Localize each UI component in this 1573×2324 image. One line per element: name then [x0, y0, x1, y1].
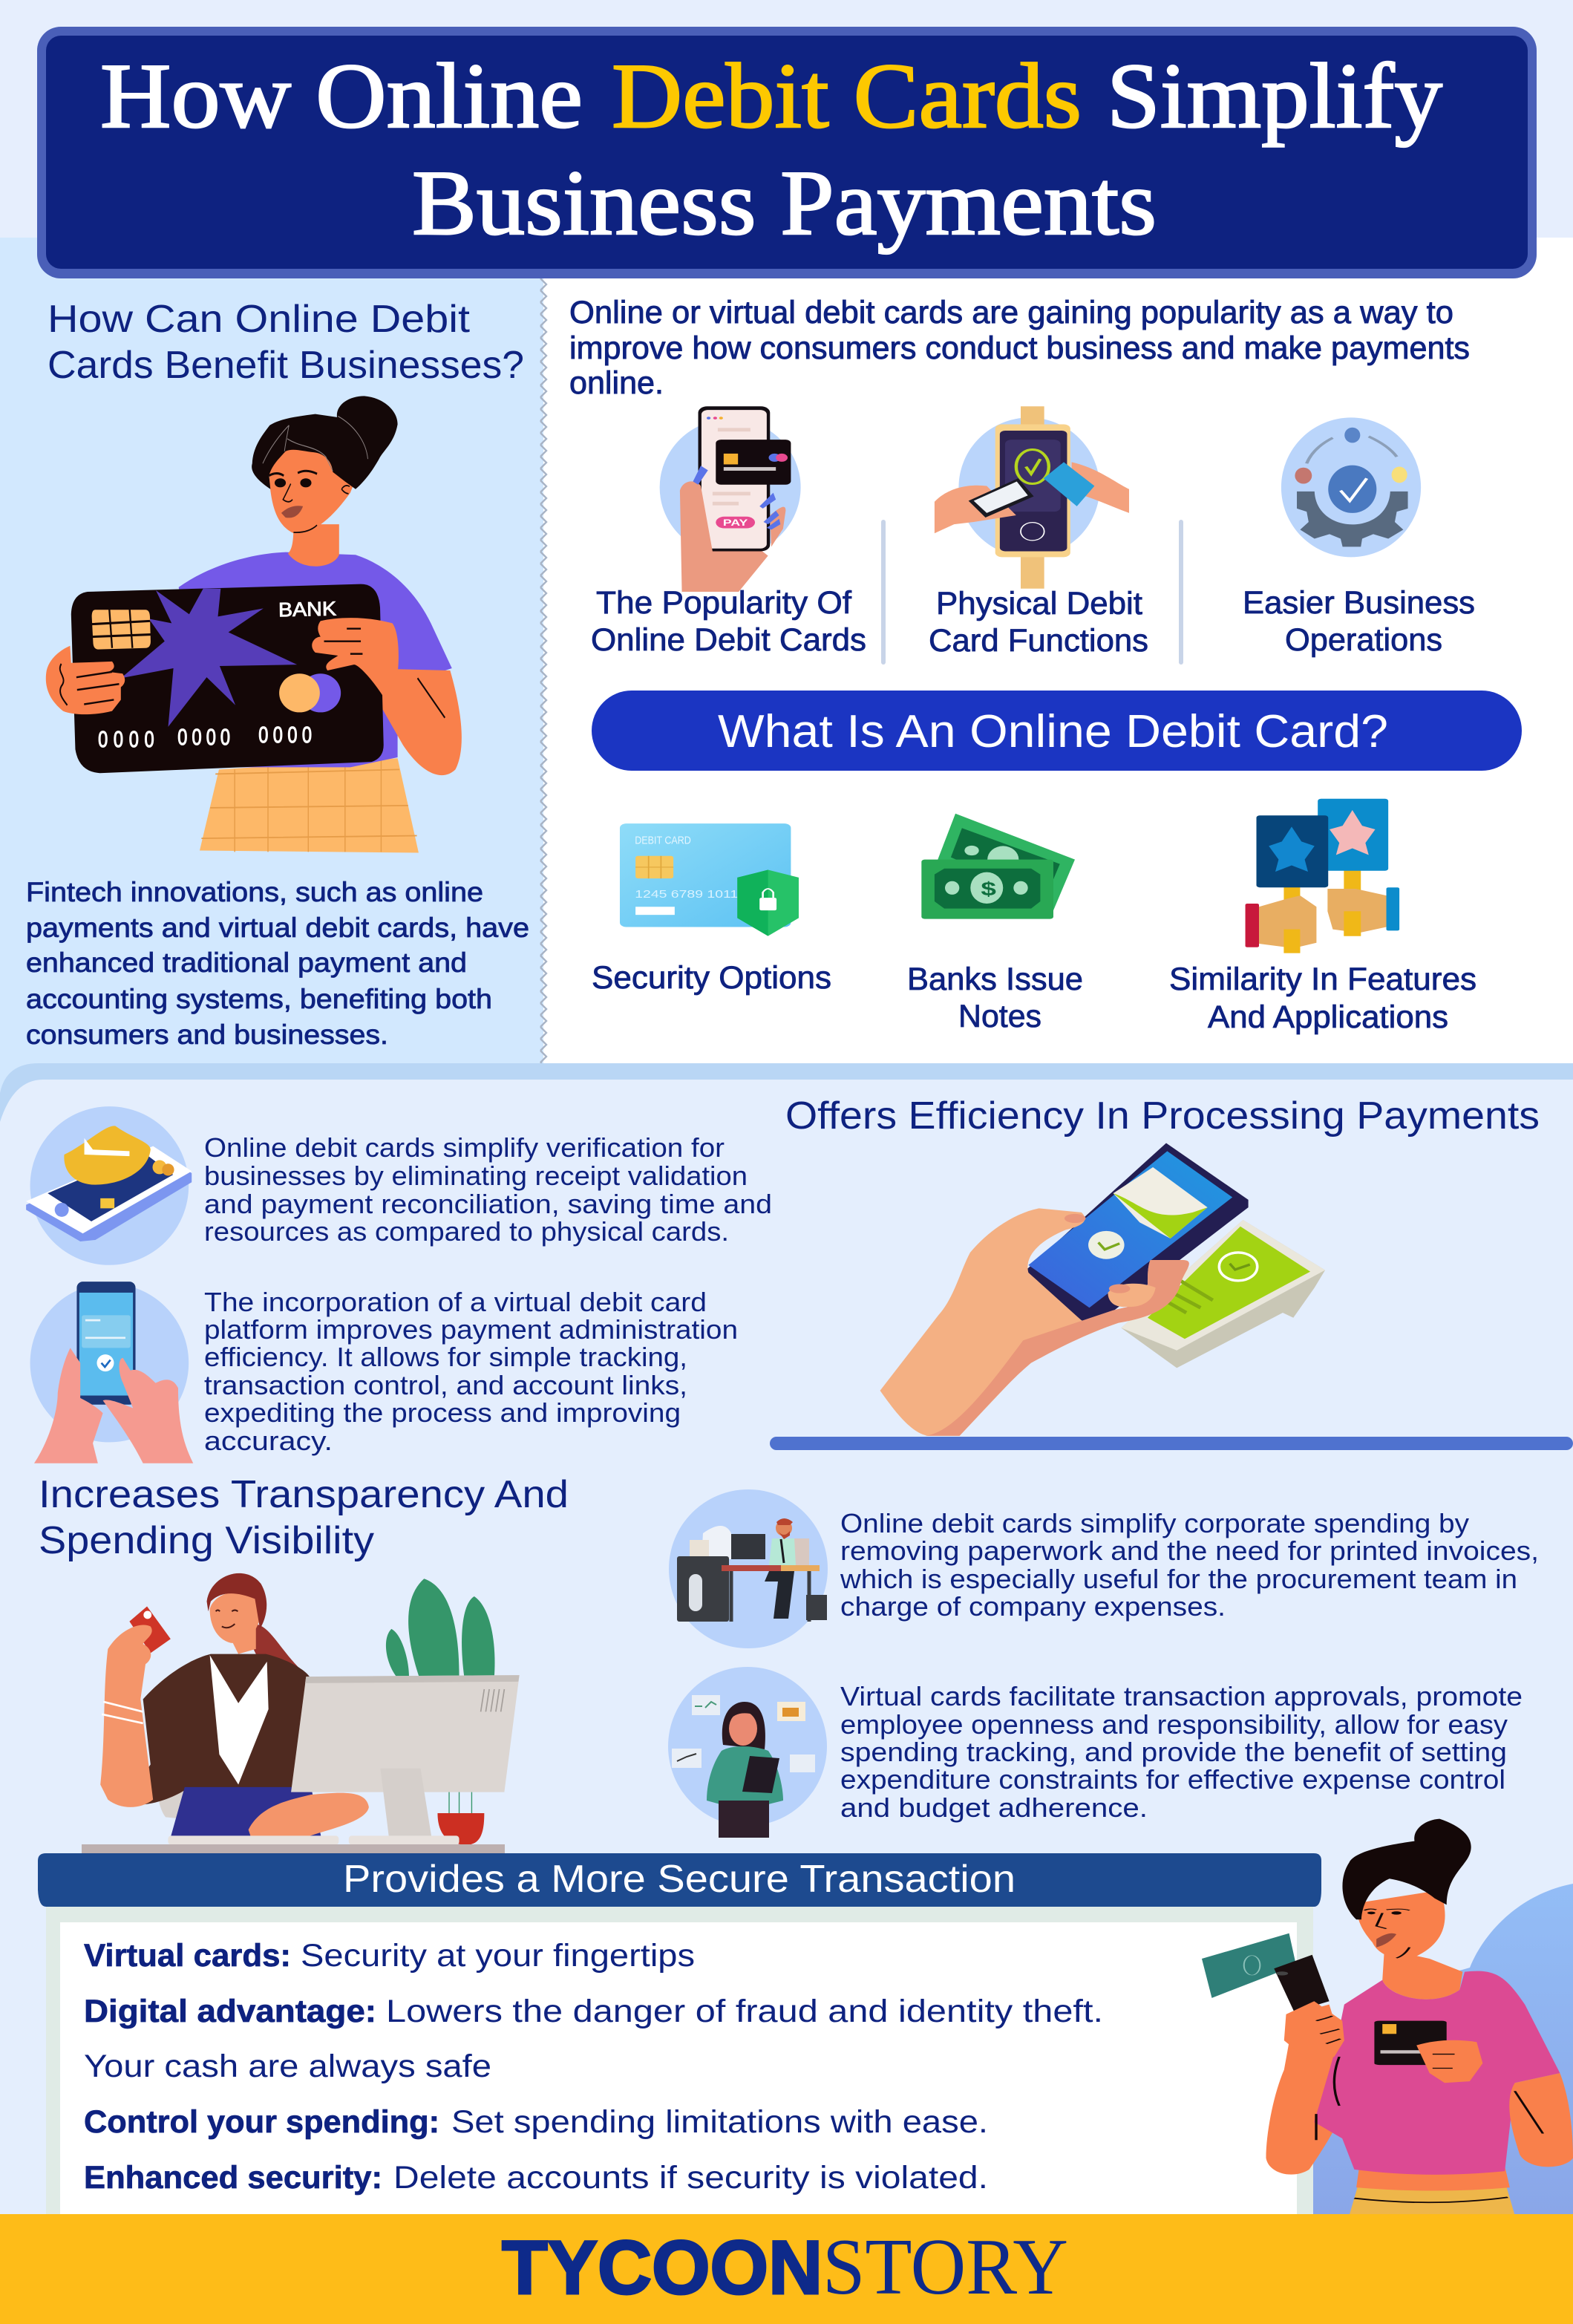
hand — [880, 1208, 1189, 1436]
right arm — [364, 669, 462, 775]
text: intro paragraph: online. — [569, 365, 664, 401]
arm and hand with card — [129, 1606, 171, 1653]
list line 2 — [84, 1994, 1103, 2029]
neck — [288, 524, 339, 567]
chair — [156, 1764, 191, 1820]
label: banks issue notes: Banks Issue — [907, 962, 1083, 997]
pill heading: what is an online debit card: What Is An Online Debit Card? — [718, 706, 1388, 757]
text: transaction approvals paragraph — [840, 1681, 1523, 1823]
text: platform paragraph: efficiency. It allows for simple tracking, — [204, 1342, 687, 1372]
label: similarity in features: Similarity In Features — [1169, 962, 1476, 997]
list line 5 — [84, 2160, 988, 2196]
text: corporate spending paragraph: removing paperwork and the need for printed invoices, — [840, 1535, 1539, 1566]
phone — [1274, 1955, 1330, 2011]
keyboard — [168, 1835, 339, 1845]
text: intro paragraph: improve how consumers conduct business and make payments — [569, 330, 1470, 366]
right hand — [312, 618, 399, 699]
text: corporate spending paragraph: which is especially useful for the procurement team in — [840, 1564, 1517, 1594]
label: banks issue notes — [907, 962, 1083, 1034]
icon: banknotes — [921, 814, 1075, 919]
skirt — [719, 1801, 769, 1838]
illustration: woman holding bank card: 0000 — [177, 724, 230, 750]
footer logo — [502, 2223, 1068, 2311]
title line 1: Debit Cards — [612, 45, 1082, 148]
shirt — [179, 552, 452, 767]
left hand with phone — [935, 486, 1016, 533]
icon: hands with phone — [30, 1282, 193, 1463]
label: physical debit: Physical Debit — [936, 586, 1142, 621]
monitor — [731, 1534, 765, 1559]
card body — [71, 584, 384, 773]
title banner — [37, 27, 1537, 278]
palm behind phone — [682, 538, 768, 592]
title line 1: How Online — [100, 45, 583, 148]
hand on keyboard — [249, 1793, 369, 1837]
left hand — [46, 646, 125, 714]
list line 2: Lowers the danger of fraud and identity theft. — [386, 1994, 1103, 2029]
icon: security debit card — [620, 823, 799, 936]
facial features — [269, 471, 350, 532]
text: transaction approvals paragraph: employee openness and responsibility, allow for easy — [840, 1709, 1508, 1740]
banner: provides a more secure transaction — [38, 1853, 1321, 1907]
text: fintech paragraph: payments and virtual debit cards, have — [26, 913, 529, 943]
icon: gear with check — [1281, 417, 1421, 557]
heading: how can online debit cards benefit: Cards Benefit Businesses? — [48, 344, 524, 387]
banknote — [1202, 1933, 1296, 1998]
desk — [722, 1565, 781, 1571]
icon: woman with tablet — [668, 1667, 827, 1838]
label: physical debit — [929, 586, 1148, 659]
icon: hand holding phone with card: PAY — [723, 518, 748, 528]
title line 2: Business Payments — [412, 152, 1157, 255]
card text: BANK — [278, 598, 336, 621]
text: intro paragraph — [569, 295, 1470, 401]
face details — [216, 1610, 238, 1628]
skirt — [1350, 2181, 1515, 2216]
label: the popularity: Online Debit Cards — [591, 622, 866, 658]
icon: banknotes: $ — [981, 878, 996, 900]
worker — [787, 1538, 809, 1565]
label: banks issue notes: Notes — [958, 999, 1041, 1034]
tablet — [742, 1756, 779, 1793]
shirt — [1314, 1971, 1560, 2175]
text: platform paragraph: platform improves payment administration — [204, 1314, 738, 1345]
icon: security debit card: DEBIT CARD — [635, 835, 691, 846]
list line 1: Virtual cards: — [84, 1938, 291, 1974]
text: platform paragraph: accuracy. — [204, 1426, 333, 1456]
title line 1: Simplify — [1107, 45, 1443, 148]
icon: hands holding star signs — [1246, 799, 1399, 953]
list line 4: Control your spending: — [84, 2104, 439, 2140]
text: fintech paragraph: Fintech innovations, such as online — [26, 877, 483, 907]
text: platform paragraph: The incorporation of a virtual debit card — [204, 1287, 707, 1317]
text: fintech paragraph: enhanced traditional payment and — [26, 947, 467, 978]
footer logo: TYCOON — [502, 2225, 823, 2310]
text: fintech paragraph: consumers and businesses. — [26, 1019, 388, 1050]
text: corporate spending paragraph: Online debit cards simplify corporate spending by — [840, 1508, 1469, 1538]
neck and head — [223, 1624, 256, 1654]
heading: how can online debit cards benefit: How Can Online Debit — [48, 298, 471, 341]
list line 4: Set spending limitations with ease. — [451, 2104, 988, 2140]
hand over phone — [680, 481, 720, 592]
left arm — [1266, 2005, 1344, 2175]
text: fintech paragraph — [26, 877, 529, 1050]
list line 5: Enhanced security: — [84, 2160, 382, 2196]
plant — [386, 1579, 495, 1677]
text: transaction approvals paragraph: expenditure constraints for effective expense control — [840, 1764, 1505, 1795]
banner: provides a more secure transaction: Provides a More Secure Transaction — [343, 1858, 1016, 1901]
label: easier business: Operations — [1285, 622, 1442, 658]
right hand with card — [1072, 462, 1129, 513]
skirt — [171, 1787, 321, 1837]
monitor — [291, 1675, 520, 1792]
illustration: woman holding bank card — [46, 396, 462, 853]
text: verification paragraph: Online debit cards simplify verification for — [204, 1132, 725, 1163]
text: transaction approvals paragraph: Virtual cards facilitate transaction approvals, promote — [840, 1681, 1523, 1711]
text: platform paragraph — [204, 1287, 738, 1456]
list line 1 — [84, 1938, 695, 1974]
panel: lower section background — [0, 1063, 1573, 2220]
face — [269, 439, 356, 534]
chat bubbles — [692, 1695, 720, 1715]
text: corporate spending paragraph: charge of company expenses. — [840, 1591, 1226, 1622]
card chip — [92, 609, 151, 650]
hand card — [1374, 2021, 1447, 2065]
terminal — [1121, 1220, 1325, 1368]
title line 1 — [100, 45, 1443, 148]
neck — [1382, 1949, 1462, 2000]
shirt — [210, 1655, 269, 1784]
list line 2: Digital advantage: — [84, 1994, 376, 2029]
list line 3: Your cash are always safe — [84, 2049, 491, 2084]
face — [729, 1711, 757, 1746]
icon: security debit card: 1245 6789 1011 — [635, 888, 738, 900]
right arm — [1509, 2073, 1573, 2167]
label: easier business — [1243, 585, 1475, 658]
list line 4 — [84, 2104, 988, 2140]
text: verification paragraph: and payment reconciliation, saving time and — [204, 1189, 772, 1219]
list line 5: Delete accounts if security is violated. — [393, 2160, 988, 2196]
decorative blue arch — [1313, 1884, 1573, 2216]
face — [1356, 1890, 1445, 1959]
label: security options: Security Options — [592, 960, 831, 996]
label: easier business: Easier Business — [1243, 585, 1475, 621]
divider bar — [770, 1437, 1573, 1450]
card on phone — [716, 440, 791, 485]
text: platform paragraph: transaction control, and account links, — [204, 1370, 687, 1400]
midriff — [1356, 2167, 1510, 2191]
label: the popularity — [591, 585, 866, 658]
phone hand — [1284, 2001, 1344, 2063]
hair — [1342, 1819, 1471, 1919]
icon: desk worker with shredder — [669, 1489, 828, 1648]
text: transaction approvals paragraph: spending tracking, and provide the benefit of setting — [840, 1737, 1507, 1767]
skirt — [200, 758, 419, 853]
text: transaction approvals paragraph: and budget adherence. — [840, 1792, 1148, 1823]
footer band — [0, 2214, 1573, 2324]
label: similarity in features: And Applications — [1208, 999, 1448, 1035]
heading: increases transparency: Spending Visibility — [39, 1519, 374, 1562]
heading: offers efficiency: Offers Efficiency In Processing Payments — [785, 1094, 1540, 1137]
heading: increases transparency: Increases Transparency And — [39, 1473, 569, 1516]
text: fintech paragraph: accounting systems, benefiting both — [26, 984, 492, 1014]
hair — [252, 396, 398, 489]
phone — [1023, 1143, 1249, 1325]
label: similarity in features — [1169, 962, 1476, 1035]
illustration: woman at desk with card — [100, 1573, 520, 1845]
label: the popularity: The Popularity Of — [596, 585, 852, 621]
list line 1: Security at your fingertips — [301, 1938, 695, 1974]
fists — [1259, 895, 1316, 948]
panel: secure transaction list — [46, 1907, 1313, 2216]
pill heading: what is an online debit card — [592, 691, 1522, 771]
card brand circles — [300, 673, 341, 712]
pay button — [716, 517, 755, 529]
icon: payment terminal — [935, 406, 1129, 589]
illustration: woman holding bank card: 0000 — [98, 726, 154, 752]
heading: increases transparency — [39, 1473, 569, 1562]
card hand — [1416, 2040, 1482, 2083]
text: verification paragraph: businesses by eliminating receipt validation — [204, 1161, 748, 1191]
label: physical debit: Card Functions — [929, 623, 1148, 659]
illustration: hand with phone at payment terminal — [880, 1143, 1325, 1436]
hair — [722, 1702, 765, 1749]
text: intro paragraph: Online or virtual debit cards are gaining popularity as a way to — [569, 295, 1453, 330]
footer logo: STORY — [823, 2223, 1068, 2311]
illustration: woman holding bank card: 0000 — [258, 722, 312, 748]
text: verification paragraph: resources as compared to physical cards. — [204, 1216, 729, 1247]
illustration: woman with phone, card and cash — [1202, 1819, 1573, 2216]
pot — [437, 1813, 484, 1845]
shield — [737, 870, 799, 936]
heading: how can online debit cards benefit — [48, 298, 524, 387]
desk base — [82, 1844, 505, 1854]
icon: isometric phone with shield — [26, 1106, 192, 1265]
jacket — [125, 1654, 311, 1805]
text: corporate spending paragraph — [840, 1508, 1539, 1622]
facial features — [1364, 1909, 1410, 1958]
text: verification paragraph — [204, 1132, 772, 1247]
text: platform paragraph: expediting the process and improving — [204, 1397, 681, 1428]
body — [707, 1746, 783, 1804]
card star — [121, 589, 297, 727]
hair tail — [253, 1624, 309, 1684]
icon: hand holding phone with card — [660, 406, 801, 592]
